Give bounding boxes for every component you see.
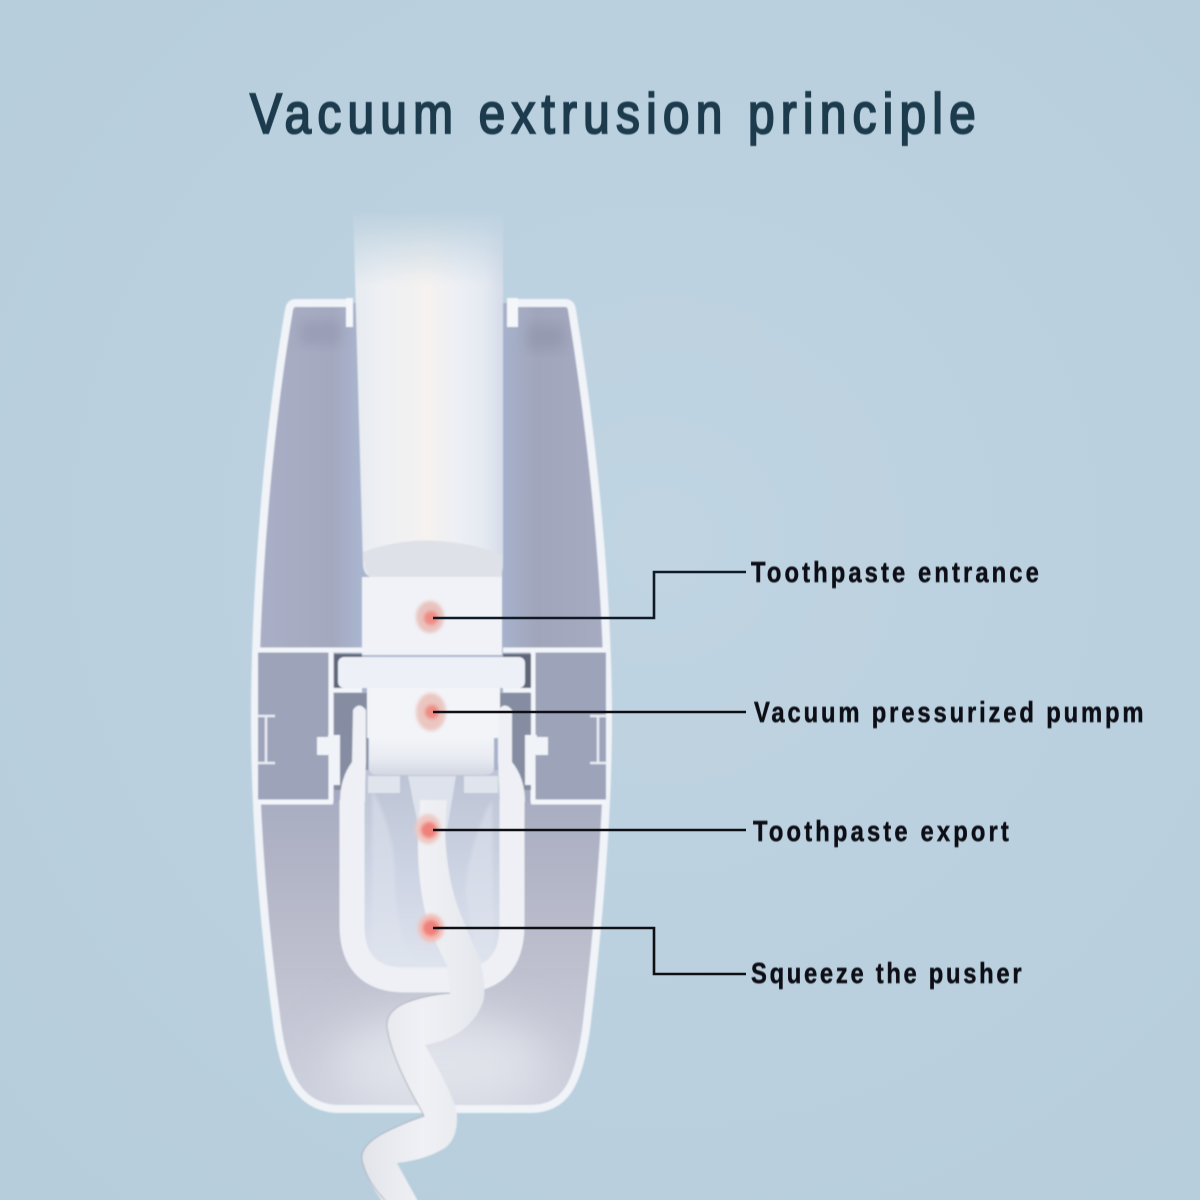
pump cylinder xyxy=(367,688,500,738)
infographic canvas xyxy=(249,90,1142,1200)
dispenser shell xyxy=(240,298,620,1117)
toothpaste strand xyxy=(362,800,484,1200)
top posts xyxy=(346,298,518,327)
leader line: toothpaste entrance xyxy=(433,572,746,618)
label: squeeze the pusher: Squeeze the pusher xyxy=(751,957,1022,990)
lower recess xyxy=(334,693,531,790)
marker: toothpaste export xyxy=(415,814,441,844)
pump ring xyxy=(369,738,494,775)
toothpaste tube xyxy=(353,205,503,577)
dark housing recess xyxy=(334,654,531,688)
label: vacuum pressurized pump: Vacuum pressurized pumpm xyxy=(754,696,1144,729)
label: toothpaste entrance: Toothpaste entrance xyxy=(751,556,1039,589)
title: Vacuum extrusion principle xyxy=(250,82,976,146)
dispenser illustration xyxy=(240,205,620,1200)
label: toothpaste export: Toothpaste export xyxy=(753,815,1009,848)
marker: vacuum pressurized pump xyxy=(416,693,446,731)
side blocks under pump xyxy=(368,776,498,793)
pump collar xyxy=(362,577,502,655)
nozzle neck xyxy=(408,776,456,830)
leader line: vacuum pressurized pump xyxy=(433,711,746,713)
interior highlights xyxy=(372,790,494,965)
pivot pin right xyxy=(525,735,548,785)
marker: toothpaste entrance xyxy=(416,601,444,633)
leader line: toothpaste export xyxy=(433,829,746,831)
flange xyxy=(338,657,525,688)
marker: squeeze the pusher xyxy=(418,914,444,942)
right bracket panel xyxy=(503,650,606,802)
U-shaped pusher xyxy=(340,706,525,980)
left bracket panel xyxy=(258,650,362,802)
leader line: squeeze the pusher xyxy=(433,928,746,974)
pusher interior xyxy=(362,770,504,970)
pivot pin left xyxy=(317,735,340,785)
